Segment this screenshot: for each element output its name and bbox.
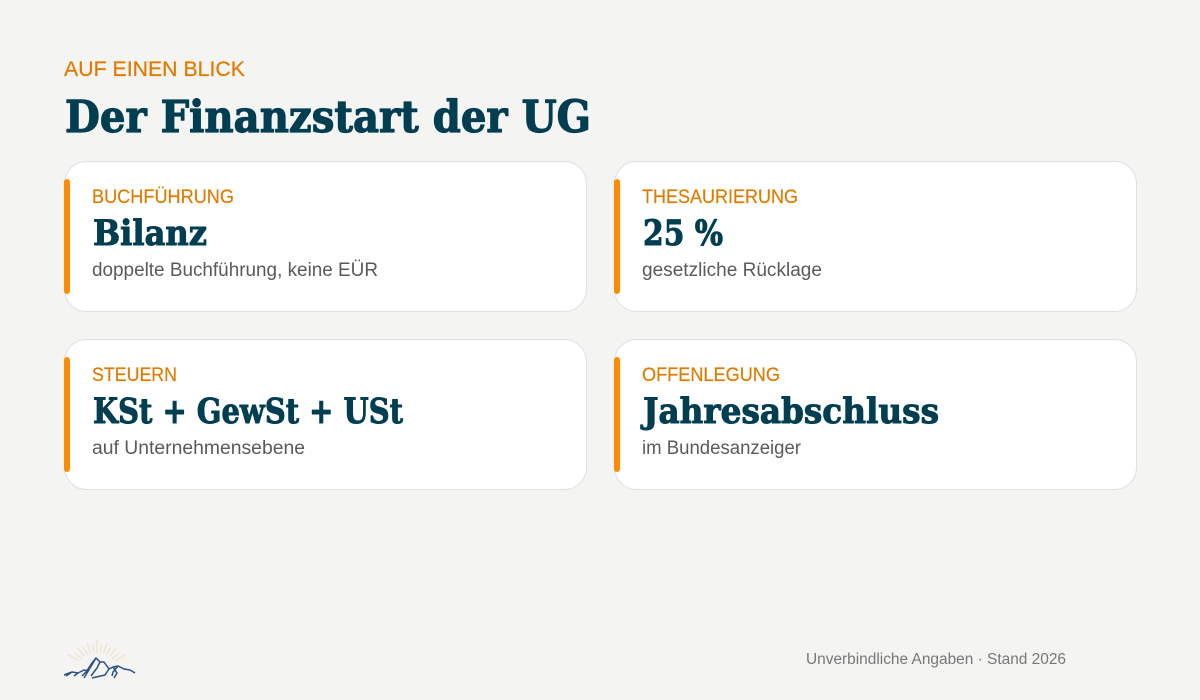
eyebrow: AUF EINEN BLICK — [64, 58, 245, 81]
title: Der Finanzstart der UG — [65, 92, 591, 143]
panel: Offenlegung — [614, 340, 1136, 490]
accent bar — [64, 179, 70, 294]
footer note: Unverbindliche Angaben · Stand 2026 — [806, 651, 1066, 668]
icon: mountain logo — [64, 640, 135, 678]
accent bar — [614, 179, 620, 294]
label: STEUERN — [92, 365, 177, 386]
value: 25 % — [643, 213, 723, 254]
description: auf Unternehmensebene — [92, 438, 305, 459]
label: OFFENLEGUNG — [642, 365, 780, 386]
description: im Bundesanzeiger — [642, 438, 802, 459]
value: Jahresabschluss — [640, 391, 939, 432]
value: Bilanz — [93, 213, 207, 254]
panel: Thesaurierung — [614, 162, 1136, 312]
description: gesetzliche Rücklage — [642, 260, 822, 281]
label: THESAURIERUNG — [642, 187, 798, 208]
panel: Buchführung — [64, 162, 586, 312]
accent bar — [64, 357, 70, 472]
description: doppelte Buchführung, keine EÜR — [92, 260, 378, 281]
panel: Steuern — [64, 340, 586, 490]
label: BUCHFÜHRUNG — [92, 187, 234, 208]
accent bar — [614, 357, 620, 472]
value: KSt + GewSt + USt — [93, 391, 403, 432]
